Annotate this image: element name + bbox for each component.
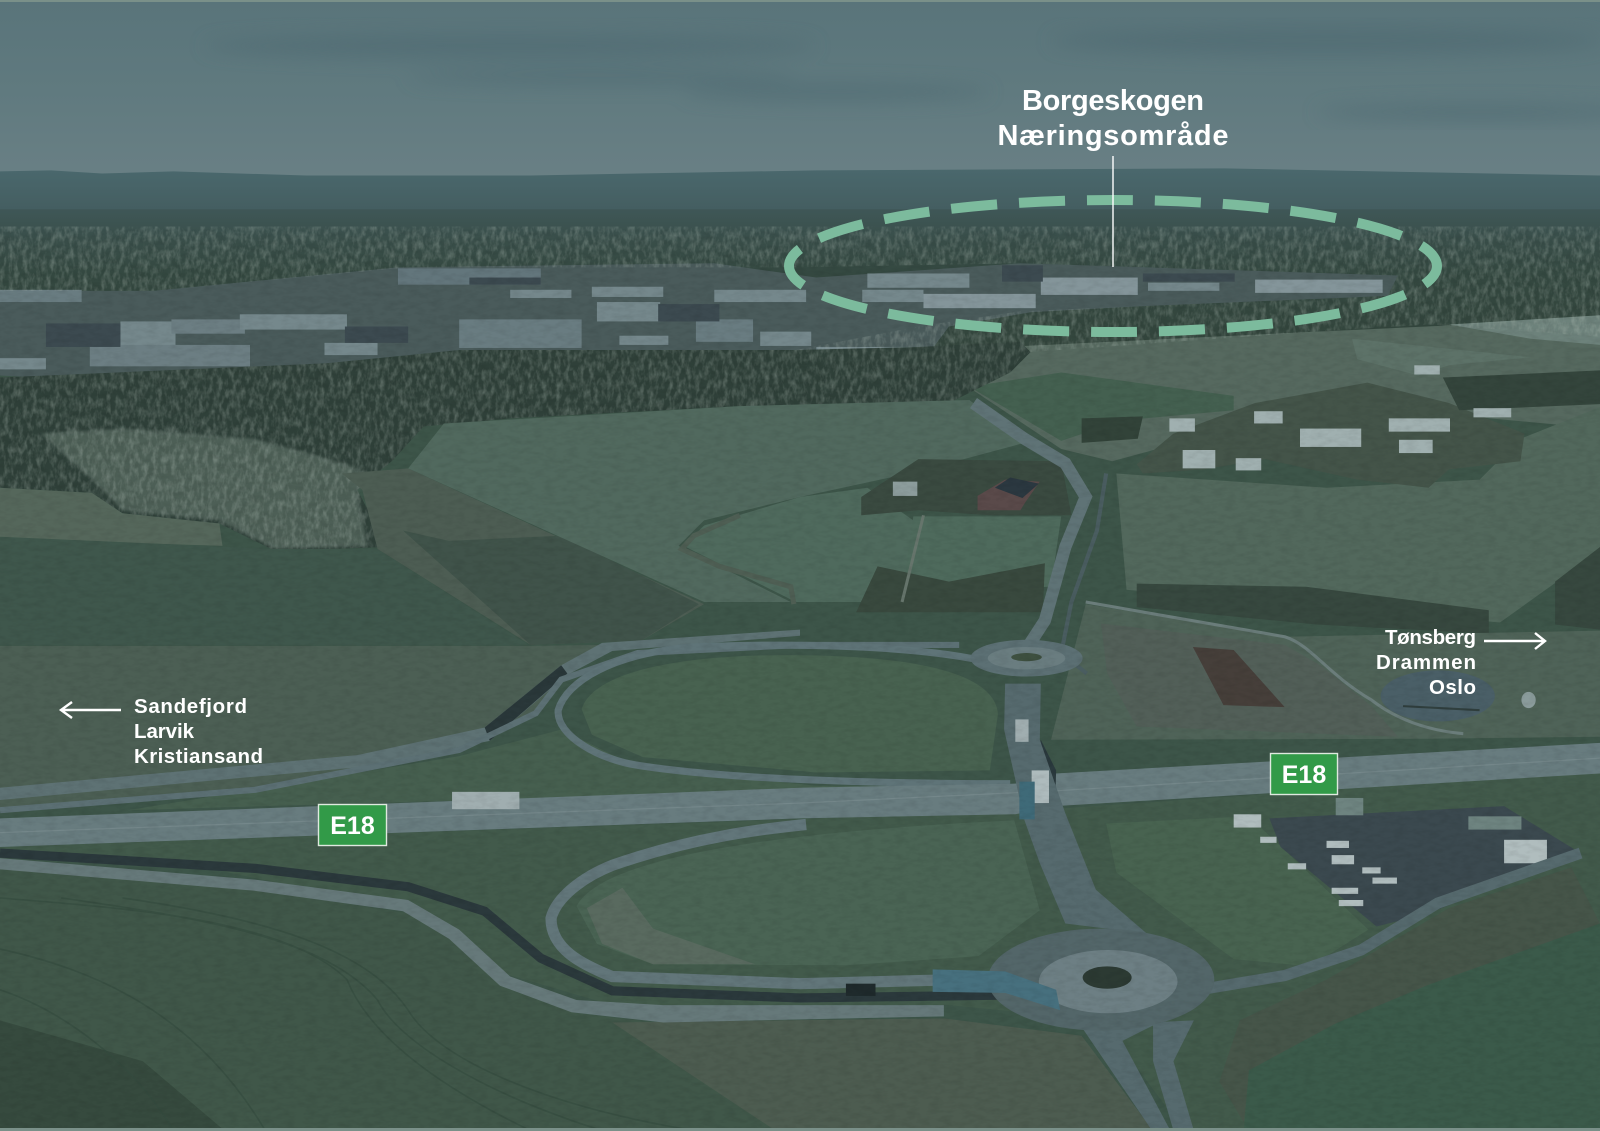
lower roundabout bbox=[988, 929, 1214, 1031]
lower loop road bbox=[551, 824, 1041, 984]
field furrows bbox=[0, 898, 694, 1131]
parking lot bbox=[1269, 806, 1581, 927]
hedgerow bbox=[1137, 584, 1489, 634]
upper interchange infield bbox=[582, 655, 998, 772]
east road bbox=[1199, 853, 1581, 990]
E18 road sign west: E18 bbox=[330, 812, 375, 840]
E18 motorway bbox=[0, 743, 1600, 847]
leader line from label to area bbox=[1112, 156, 1114, 267]
photo grain bbox=[24, 269, 1594, 1051]
industrial area bbox=[0, 263, 1398, 388]
right lower field bbox=[1051, 604, 1600, 740]
creek bbox=[682, 515, 794, 604]
field east bbox=[1116, 407, 1600, 622]
pond bbox=[1381, 670, 1495, 721]
west approach road bbox=[0, 645, 959, 810]
direction east: Tønsberg, Drammen, Oslo bbox=[1376, 626, 1545, 699]
upper roundabout bbox=[970, 640, 1083, 677]
bottom left field bbox=[0, 868, 1122, 1131]
E18 road sign east bbox=[1270, 754, 1338, 794]
arrow left bbox=[61, 702, 121, 718]
vehicles bbox=[452, 719, 1060, 1010]
east destinations: Drammen bbox=[1376, 651, 1476, 674]
location label: Borgeskogen Næringsområde: Næringsområde bbox=[998, 120, 1228, 152]
west destinations bbox=[134, 695, 263, 768]
lower central fields bbox=[684, 488, 913, 602]
lower infield bbox=[577, 820, 1040, 965]
noise fence upper bbox=[0, 630, 800, 800]
far forest belt bbox=[0, 209, 1600, 357]
large central field bbox=[408, 400, 1024, 602]
village bbox=[1082, 416, 1143, 443]
west destinations: Sandefjord bbox=[134, 695, 247, 718]
west destinations: Kristiansand bbox=[134, 745, 263, 768]
farm house and trees bbox=[856, 459, 1071, 612]
arrow right bbox=[1484, 633, 1545, 649]
sky bbox=[0, 0, 1600, 184]
upper loop road bbox=[558, 645, 1010, 784]
dashed ellipse marking the area bbox=[789, 200, 1437, 332]
dark service road bbox=[0, 853, 1020, 998]
east destinations: Tønsberg bbox=[1385, 626, 1476, 649]
ploughed strip bbox=[342, 468, 704, 645]
left lower meadow bbox=[0, 645, 612, 810]
E18 road sign east: E18 bbox=[1282, 761, 1326, 789]
south road bbox=[1081, 1020, 1194, 1131]
east destinations: Oslo bbox=[1429, 676, 1476, 699]
direction west: Sandefjord, Larvik, Kristiansand bbox=[61, 695, 263, 768]
distant hills bbox=[0, 168, 1600, 235]
left small meadow bbox=[0, 488, 222, 546]
dark field bbox=[0, 537, 529, 645]
location label: Borgeskogen Næringsområde: Borgeskogen bbox=[1022, 85, 1204, 117]
upper right farmland bbox=[969, 318, 1600, 461]
west destinations: Larvik bbox=[134, 720, 195, 743]
east destinations bbox=[1376, 626, 1476, 699]
E18 road sign west bbox=[318, 804, 386, 846]
north-south road bbox=[1004, 684, 1147, 934]
mid forest bbox=[0, 342, 1031, 551]
noise fence lower bbox=[0, 858, 944, 1022]
motorway bridge shadow bbox=[1037, 740, 1066, 832]
bottom right field bbox=[1219, 867, 1600, 1122]
location label: Borgeskogen Næringsområde bbox=[998, 85, 1228, 152]
lower grass bbox=[0, 770, 1600, 1131]
